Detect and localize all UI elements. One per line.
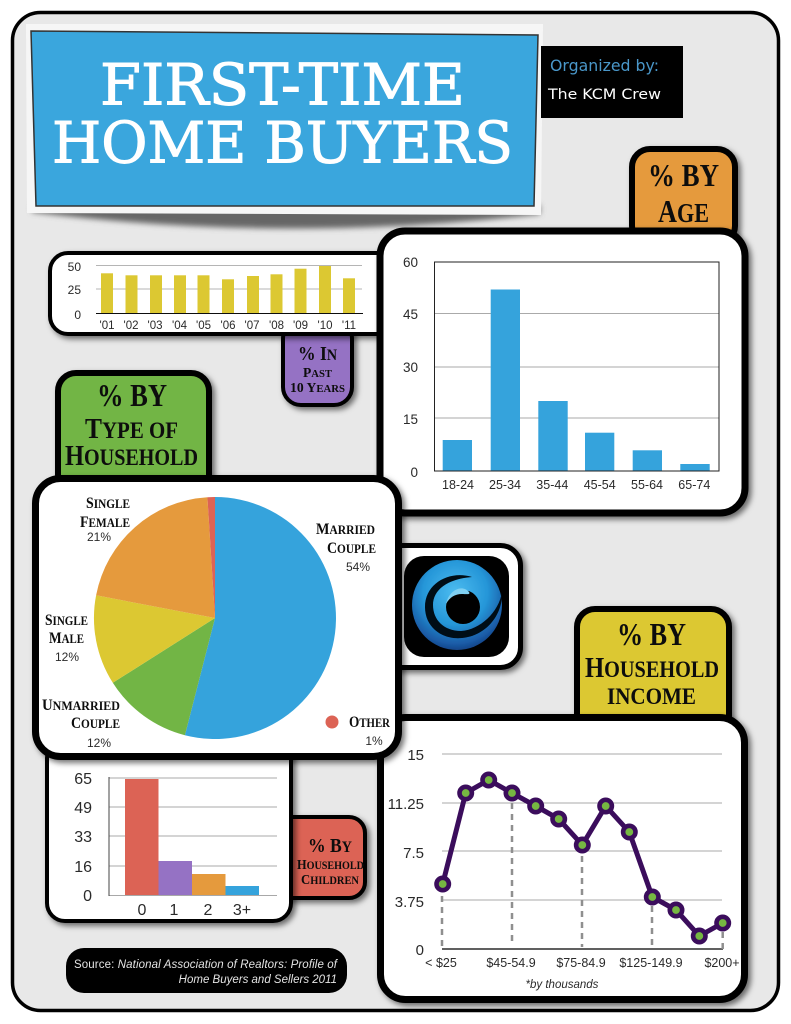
yearly bar chart: 50	[68, 260, 81, 274]
income line chart: $125-149.9	[619, 956, 683, 970]
yearly bar chart: '11	[342, 320, 356, 332]
tab: percent by household children: % BY	[308, 835, 352, 857]
children bar chart: 0	[138, 902, 147, 919]
pie chart	[94, 497, 336, 739]
tab: percent by household children: HOUSEHOLD	[297, 858, 364, 873]
tab: percent by age: % BY	[648, 157, 719, 193]
income line chart: *by thousands	[526, 979, 599, 991]
organizer box: Organized by:	[550, 56, 659, 75]
title text: FIRST-TIME	[100, 52, 465, 118]
yearly bar chart: '06	[220, 320, 236, 332]
label: married couple: COUPLE	[327, 540, 376, 557]
label: single female	[80, 495, 130, 544]
tab: percent in past 10 years: % IN	[298, 343, 337, 365]
yearly bar chart: 25	[68, 283, 81, 297]
tab: percent in past 10 years	[283, 320, 352, 405]
income line chart: $200+	[704, 956, 740, 970]
source note: Home Buyers and Sellers 2011	[179, 974, 337, 986]
source note	[66, 948, 347, 993]
label: married couple	[316, 521, 376, 574]
label: single male: SINGLE	[45, 612, 88, 629]
label: other	[326, 714, 391, 748]
yearly bar chart: '03	[148, 320, 162, 332]
income line chart: $75-84.9	[556, 956, 606, 970]
age bar chart: 25-34	[489, 478, 521, 492]
income line chart: $45-54.9	[486, 956, 536, 970]
label: unmarried couple: COUPLE	[71, 715, 120, 732]
children bar chart: 2	[204, 902, 213, 919]
income line chart: 15	[407, 747, 424, 764]
age bar chart: 15	[403, 412, 418, 427]
label: other: 1%	[365, 734, 383, 748]
title banner	[26, 24, 543, 229]
organizer box	[541, 46, 683, 118]
label: single female: SINGLE	[86, 495, 130, 512]
panel: percent by type of household pie	[36, 478, 398, 756]
age bar chart: 65-74	[678, 478, 710, 492]
tab: percent by household income: HOUSEHOLD	[585, 653, 719, 684]
label: single female: FEMALE	[80, 514, 130, 531]
yearly bar chart: '10	[318, 320, 332, 332]
panel: household children bar chart	[47, 740, 291, 921]
panel: household income line chart	[380, 718, 744, 1000]
tab: percent by type of household: HOUSEHOLD	[65, 441, 198, 472]
age bar chart: 45	[403, 307, 418, 322]
children bar chart: 16	[74, 859, 92, 876]
yearly bar chart: '04	[172, 320, 188, 332]
panel: percent in past 10 years	[50, 253, 395, 334]
yearly bar chart: 0	[74, 308, 81, 322]
tab: percent in past 10 years: 10 YEARS	[290, 381, 345, 396]
age bar chart	[403, 255, 719, 492]
organizer box: The KCM Crew	[547, 87, 661, 103]
label: married couple: 54%	[346, 560, 370, 574]
yearly bar chart: '07	[244, 320, 260, 332]
label: other: OTHER	[349, 714, 391, 731]
children bar chart: 65	[74, 771, 92, 788]
yearly bar chart: '05	[196, 320, 211, 332]
yearly bar chart	[68, 260, 363, 332]
income line chart: 7.5	[403, 845, 424, 862]
yearly bar chart: '01	[100, 320, 114, 332]
age bar chart: 55-64	[631, 478, 663, 492]
age bar chart: 0	[410, 465, 418, 480]
label: single male	[45, 612, 88, 664]
tab: percent by household children	[270, 817, 365, 898]
tab: percent by household income	[577, 609, 729, 734]
panel: percent by age	[380, 231, 745, 513]
income line chart: 0	[416, 942, 424, 959]
label: unmarried couple: 12%	[87, 736, 111, 750]
tab: percent by type of household	[58, 373, 209, 493]
income line chart: < $25	[425, 956, 457, 970]
income line chart: 11.25	[388, 796, 424, 813]
tab: percent by household income: INCOME	[607, 684, 696, 709]
tab: percent by age	[632, 149, 735, 244]
income line chart	[388, 747, 740, 991]
icon: blue swirl logo	[404, 556, 509, 657]
title text: HOME BUYERS	[52, 110, 513, 176]
age bar chart: 60	[403, 255, 418, 270]
children bar chart: 3+	[233, 902, 251, 919]
age bar chart: 30	[403, 360, 418, 375]
children bar chart: 0	[83, 888, 92, 905]
income line chart: 3.75	[395, 894, 424, 911]
label: single male: 12%	[55, 650, 79, 664]
source note: Source: National Association of Realtors: Profile of	[74, 959, 339, 971]
tab: percent by type of household: % BY	[97, 377, 167, 413]
children bar chart: 33	[74, 829, 92, 846]
age bar chart: 45-54	[584, 478, 616, 492]
yearly bar chart: '08	[269, 320, 284, 332]
children bar chart: 49	[74, 800, 92, 817]
children bar chart	[74, 771, 277, 919]
tab: percent by age: AGE	[658, 193, 709, 229]
tab: percent by type of household: TYPE OF	[85, 414, 178, 445]
children bar chart: 1	[170, 902, 179, 919]
label: married couple: MARRIED	[316, 521, 375, 538]
age bar chart: 35-44	[536, 478, 568, 492]
yearly bar chart: '02	[124, 320, 138, 332]
yearly bar chart: '09	[293, 320, 308, 332]
tab: percent by household children: CHILDREN	[301, 873, 360, 888]
label: unmarried couple	[42, 697, 120, 750]
tab: percent by household income: % BY	[617, 616, 686, 652]
age bar chart: 18-24	[442, 478, 474, 492]
label: single female: 21%	[87, 530, 111, 544]
logo panel	[380, 546, 520, 668]
label: single male: MALE	[49, 630, 84, 647]
label: unmarried couple: UNMARRIED	[42, 697, 120, 714]
tab: percent in past 10 years: PAST	[303, 366, 333, 381]
